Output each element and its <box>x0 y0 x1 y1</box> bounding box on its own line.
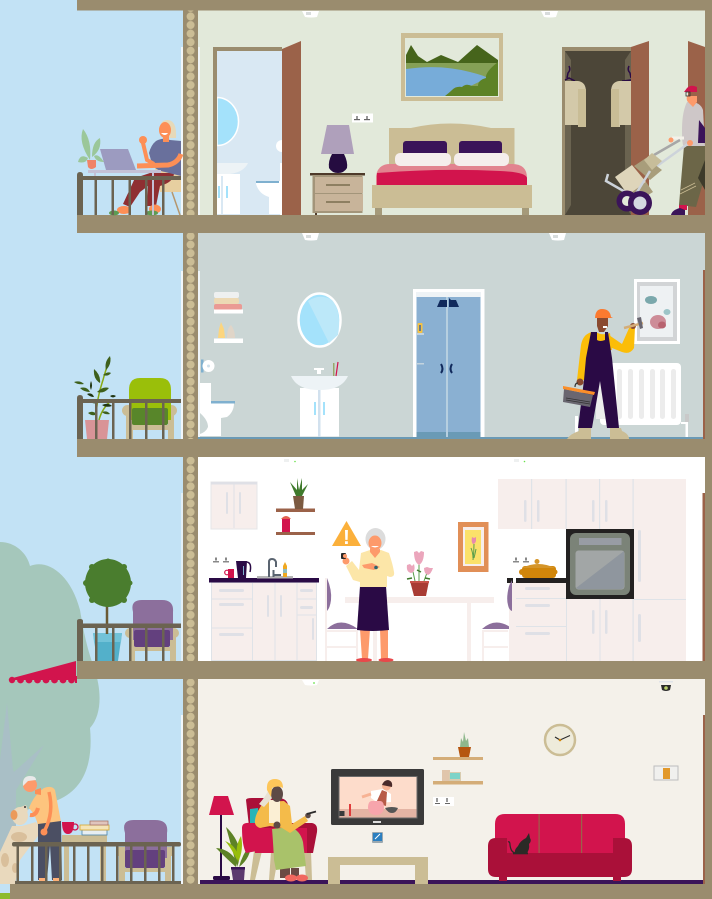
balcony 3: purple armchair <box>125 600 179 661</box>
living room: security camera <box>659 681 673 691</box>
person: man petting dog <box>23 776 62 881</box>
bathroom: bottle shelf <box>214 322 243 343</box>
kitchen: sink counter <box>209 559 319 661</box>
living room: sofa <box>488 814 632 881</box>
bathroom: shower cabin <box>413 289 484 437</box>
bathroom: oval mirror <box>298 294 340 346</box>
person: delivery man with hand truck <box>606 86 705 215</box>
bathroom: floor strip <box>198 437 703 439</box>
living room: television <box>331 769 424 825</box>
kitchen: dining table and chairs <box>325 578 513 661</box>
balcony 1: potted plant <box>78 129 104 169</box>
background tree <box>0 542 100 899</box>
bathroom: toilet <box>200 383 235 436</box>
balcony 4: side table with books and mug <box>62 821 109 883</box>
kitchen: sockets <box>213 558 529 562</box>
bathroom: toilet paper <box>201 360 214 372</box>
living room: wall socket <box>433 797 454 806</box>
balcony 4: purple armchair <box>118 820 172 882</box>
balcony 2: railing <box>77 395 181 439</box>
room: bedroom wall <box>198 10 705 216</box>
kitchen: pink flowers in pot <box>407 551 433 596</box>
person: elderly woman with phone <box>341 528 394 662</box>
living room: floor lamp <box>209 796 234 880</box>
bathroom: radiator <box>575 363 689 437</box>
room: bathroom wall <box>198 233 705 440</box>
bedroom: wall socket <box>352 114 373 122</box>
living room: plant <box>216 827 251 880</box>
person: elderly woman with remote <box>255 779 316 882</box>
bedroom: landscape painting <box>401 33 503 101</box>
balcony 2: green armchair <box>122 378 177 439</box>
bedroom: ensuite door <box>213 41 301 215</box>
kitchen: wall shelves with plant and canister <box>276 478 315 535</box>
bedroom: table lamp <box>321 125 354 173</box>
living room: black cat <box>508 833 531 854</box>
kitchen: warning sign <box>332 521 361 549</box>
balcony 4: dog <box>0 805 41 884</box>
living room: floor strip <box>200 880 703 884</box>
kitchen: warning sign: ! <box>343 527 350 549</box>
bedroom: wardrobe <box>562 41 705 215</box>
living room: remote icon <box>372 832 383 843</box>
kitchen: oven <box>566 529 634 599</box>
kitchen: right counter with pot <box>507 559 566 611</box>
living room: light switch <box>654 766 678 780</box>
room: kitchen wall <box>198 457 705 662</box>
kitchen: tulip picture <box>458 522 488 572</box>
bathroom: sink cabinet <box>291 362 348 437</box>
kitchen: wall cabinet <box>211 482 257 529</box>
balcony 2: potted plant <box>74 356 116 439</box>
balcony 1: woman at laptop <box>88 120 181 216</box>
bedroom: bed <box>372 124 532 215</box>
living room: wall clock <box>545 725 575 755</box>
bathroom: towel shelf <box>214 292 243 314</box>
bathroom: abstract painting <box>634 279 680 344</box>
outer right wall <box>702 0 712 899</box>
brick column <box>183 0 198 899</box>
balcony 4: railing <box>12 842 181 884</box>
person: repairman with hammer and toolbox <box>563 309 643 439</box>
balcony 3: round potted tree <box>83 558 132 661</box>
bedroom: nightstand <box>310 173 365 215</box>
awning <box>9 661 77 683</box>
living room: armchair <box>242 798 317 880</box>
white wall edges <box>181 47 200 884</box>
smoke detectors <box>284 11 566 686</box>
balcony 1: railing <box>77 172 181 215</box>
balcony 3: railing <box>77 619 181 661</box>
room: living room wall <box>198 679 705 885</box>
living room: wall shelves <box>433 732 483 784</box>
kitchen: tall units and wall cupboards <box>498 479 686 661</box>
living room: coffee table <box>328 857 428 884</box>
